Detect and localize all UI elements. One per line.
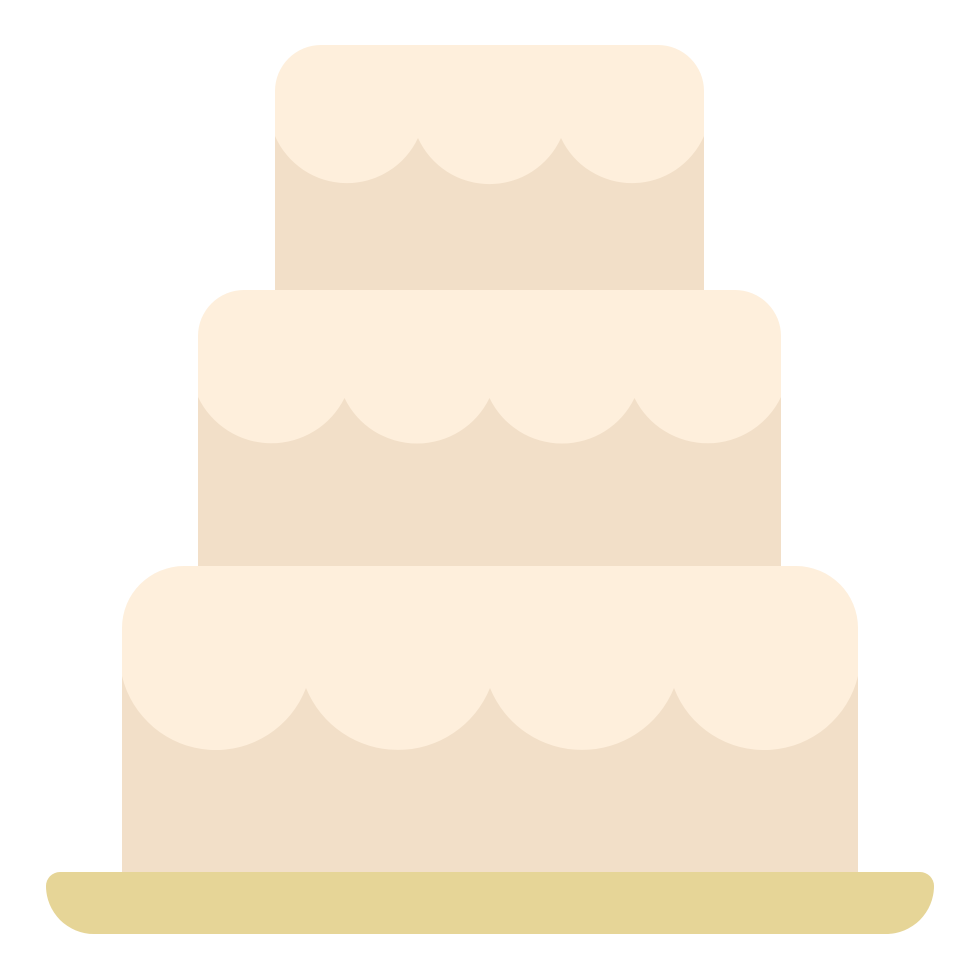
middle tier [198, 290, 781, 567]
top tier icing [275, 45, 704, 184]
top tier [275, 45, 704, 291]
cake plate [46, 872, 934, 934]
bottom tier body [122, 660, 858, 873]
middle tier body [198, 380, 781, 567]
middle tier icing [198, 290, 781, 444]
top tier body [275, 120, 704, 291]
bottom tier icing [122, 566, 858, 750]
bottom tier [122, 566, 858, 873]
